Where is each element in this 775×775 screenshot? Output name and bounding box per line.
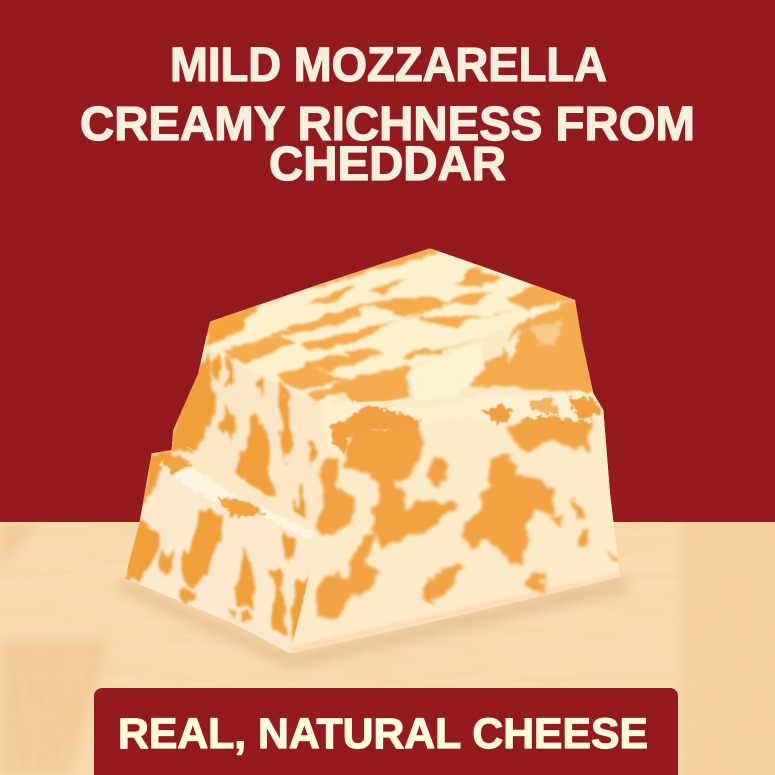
cheese block: [120, 240, 627, 660]
cheese small ragged step: [160, 460, 317, 540]
banner: [94, 688, 678, 775]
cheese upper front face: [340, 300, 595, 407]
cheese top face: [203, 245, 577, 403]
wooden table surface: [0, 500, 775, 775]
headline: [80, 39, 695, 191]
headline: CREAMY RICHNESS FROM: [80, 98, 695, 151]
cheese torn ledge: [320, 392, 603, 453]
cheese left upper face: [172, 350, 204, 450]
headline: MILD MOZZARELLA: [170, 39, 607, 92]
cheese front face: [290, 393, 620, 653]
cheese shadow: [120, 578, 630, 668]
cheese lower left face: [131, 454, 288, 652]
banner label: REAL, NATURAL CHEESE: [118, 710, 648, 758]
cheese base colour: [120, 240, 627, 660]
headline: CHEDDAR: [269, 138, 506, 191]
